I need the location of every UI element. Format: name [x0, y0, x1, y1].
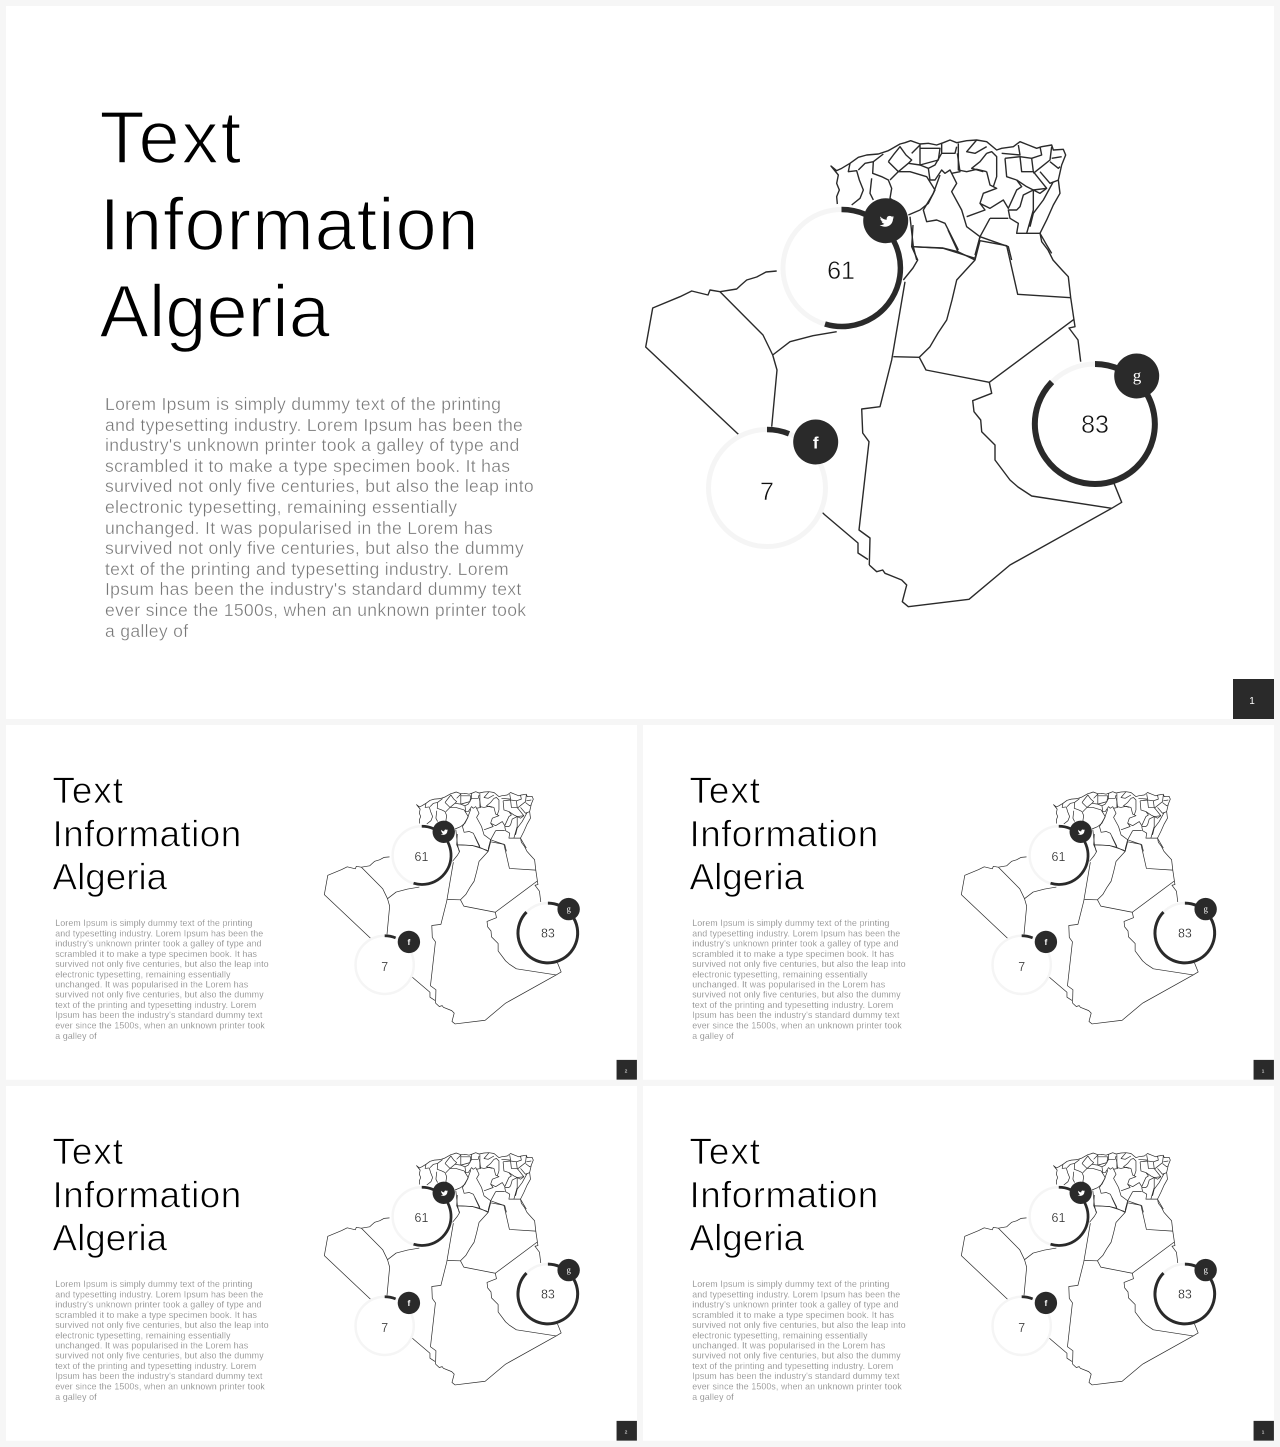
text block: text of the printing and typesetting industry. Lorem: [105, 559, 509, 579]
text block: and typesetting industry. Lorem Ipsum has been the: [692, 1290, 900, 1300]
panel: small slide 5: [643, 1086, 1274, 1441]
text block: scrambled it to make a type specimen book. It has: [692, 1310, 894, 1320]
gauge: twitter 61: 61: [1052, 1211, 1065, 1225]
text block: and typesetting industry. Lorem Ipsum has been the: [55, 1290, 263, 1300]
text block: [105, 394, 534, 641]
title: Information: [690, 1174, 879, 1216]
text block: a galley of: [55, 1031, 97, 1041]
text block: electronic typesetting, remaining essentially: [692, 1331, 868, 1341]
page number: 1: [1249, 696, 1255, 707]
map of Algeria: [961, 792, 1198, 1024]
text block: scrambled it to make a type specimen book. It has: [55, 949, 257, 959]
gauge: facebook 7: [708, 420, 838, 546]
text block: ever since the 1500s, when an unknown printer took: [55, 1382, 265, 1392]
page number: [617, 1421, 637, 1441]
title: Text: [690, 770, 761, 811]
gauge: facebook 7: f: [1045, 938, 1048, 948]
gauge: facebook 7: [356, 1292, 420, 1355]
text block: and typesetting industry. Lorem Ipsum has been the: [105, 415, 523, 435]
gauge: twitter 61: [1030, 1182, 1092, 1246]
text block: [692, 918, 906, 1041]
gauge: twitter 61: 61: [1052, 850, 1065, 864]
text block: text of the printing and typesetting industry. Lorem: [55, 1361, 256, 1371]
gauge: facebook 7: 7: [381, 1321, 388, 1335]
panel: small slide 2: [6, 725, 637, 1080]
page number: [1233, 679, 1274, 719]
text block: survived not only five centuries, but also the dummy: [692, 1351, 901, 1361]
text block: and typesetting industry. Lorem Ipsum has been the: [55, 929, 263, 939]
page number: [617, 1060, 637, 1080]
gauge: facebook 7: f: [813, 434, 819, 452]
gauge: facebook 7: [993, 1292, 1057, 1355]
gauge: google 83: g: [567, 1265, 572, 1275]
text block: survived not only five centuries, but also the leap into: [55, 959, 269, 969]
chart: Algeria map with gauges: [324, 791, 580, 1024]
title: Text: [53, 770, 124, 811]
map of Algeria: [324, 792, 561, 1024]
title: [53, 1131, 242, 1259]
panel: main slide: [6, 6, 1274, 719]
text block: unchanged. It was popularised in the Lorem has: [692, 980, 885, 990]
map of Algeria: [646, 140, 1122, 607]
title: Text: [100, 96, 243, 179]
title: [690, 770, 879, 898]
page number: 2: [625, 1430, 627, 1435]
gauge: google 83: 83: [1178, 1288, 1192, 1302]
chart: Algeria map with gauges: [645, 139, 1160, 608]
gauge: google 83: g: [1133, 366, 1142, 385]
gauge: facebook 7: f: [408, 1299, 411, 1309]
text block: and typesetting industry. Lorem Ipsum has been the: [692, 929, 900, 939]
text block: a galley of: [692, 1031, 734, 1041]
text block: Ipsum has been the industry's standard dummy text: [55, 1011, 263, 1021]
gauge: twitter 61: 61: [827, 257, 855, 285]
gauge: facebook 7: [993, 931, 1057, 994]
text block: survived not only five centuries, but also the dummy: [692, 990, 901, 1000]
text block: Ipsum has been the industry's standard dummy text: [692, 1372, 900, 1382]
map of Algeria: [961, 1153, 1198, 1385]
page number: 1: [1262, 1069, 1264, 1074]
text block: a galley of: [55, 1392, 97, 1402]
title: Algeria: [690, 857, 804, 898]
gauge: twitter 61: [393, 1182, 455, 1246]
text block: unchanged. It was popularised in the Lorem has: [692, 1341, 885, 1351]
text block: electronic typesetting, remaining essentially: [692, 970, 868, 980]
text block: [692, 1279, 906, 1402]
text block: Lorem Ipsum is simply dummy text of the printing: [692, 1279, 889, 1289]
page number: 1: [1262, 1430, 1264, 1435]
gauge: twitter 61: [1030, 821, 1092, 885]
title: [690, 1131, 879, 1259]
gauge: google 83: 83: [1178, 927, 1192, 941]
title: Algeria: [53, 1218, 167, 1259]
gauge: google 83: [1155, 1259, 1217, 1324]
text block: electronic typesetting, remaining essentially: [105, 497, 457, 517]
text block: survived not only five centuries, but also the leap into: [55, 1320, 269, 1330]
gauge: facebook 7: 7: [1018, 1321, 1025, 1335]
gauge: google 83: g: [1204, 1265, 1209, 1275]
page number: [1254, 1421, 1274, 1441]
text block: survived not only five centuries, but also the dummy: [55, 990, 264, 1000]
text block: survived not only five centuries, but also the leap into: [692, 1320, 906, 1330]
text block: Lorem Ipsum is simply dummy text of the printing: [55, 1279, 252, 1289]
text block: unchanged. It was popularised in the Lorem has: [105, 518, 493, 538]
panel: small slide 3: [643, 725, 1274, 1080]
gauge: twitter 61: [783, 198, 908, 326]
text block: Lorem Ipsum is simply dummy text of the printing: [692, 918, 889, 928]
title: Text: [53, 1131, 124, 1172]
text block: Ipsum has been the industry's standard dummy text: [55, 1372, 263, 1382]
gauge: twitter 61: 61: [415, 1211, 428, 1225]
gauge: facebook 7: [356, 931, 420, 994]
text block: text of the printing and typesetting industry. Lorem: [692, 1361, 893, 1371]
gauge: facebook 7: f: [408, 938, 411, 948]
text block: industry's unknown printer took a galley of type and: [55, 1300, 262, 1310]
text block: [55, 1279, 269, 1402]
text block: scrambled it to make a type specimen book. It has: [55, 1310, 257, 1320]
title: Information: [100, 183, 480, 266]
chart: Algeria map with gauges: [324, 1152, 580, 1386]
text block: industry's unknown printer took a galley of type and: [55, 939, 262, 949]
map of Algeria: [324, 1153, 561, 1385]
text block: ever since the 1500s, when an unknown printer took: [105, 600, 526, 620]
chart: Algeria map with gauges: [961, 1152, 1217, 1386]
title: Information: [53, 1174, 242, 1216]
title: Algeria: [100, 270, 330, 353]
text block: unchanged. It was popularised in the Lorem has: [55, 980, 248, 990]
text block: industry's unknown printer took a galley of type and: [105, 435, 520, 455]
text block: ever since the 1500s, when an unknown printer took: [692, 1382, 902, 1392]
text block: electronic typesetting, remaining essentially: [55, 970, 231, 980]
gauge: google 83: g: [1204, 904, 1209, 914]
page number: 2: [625, 1069, 627, 1074]
title: Information: [690, 813, 879, 855]
text block: scrambled it to make a type specimen book. It has: [105, 456, 510, 476]
gauge: twitter 61: [393, 821, 455, 885]
gauge: facebook 7: 7: [381, 960, 388, 974]
gauge: google 83: 83: [1081, 411, 1109, 439]
text block: survived not only five centuries, but also the leap into: [692, 959, 906, 969]
chart: Algeria map with gauges: [960, 791, 1217, 1024]
text block: Lorem Ipsum is simply dummy text of the printing: [105, 394, 501, 414]
title: [100, 96, 480, 353]
title: [53, 770, 242, 898]
text block: [55, 918, 269, 1041]
gauge: google 83: 83: [541, 1288, 555, 1302]
text block: ever since the 1500s, when an unknown printer took: [55, 1021, 265, 1031]
text block: a galley of: [692, 1392, 734, 1402]
gauge: google 83: 83: [541, 927, 555, 941]
text block: scrambled it to make a type specimen book. It has: [692, 949, 894, 959]
gauge: google 83: [518, 898, 580, 963]
gauge: facebook 7: f: [1045, 1299, 1048, 1309]
panel: small slide 4: [6, 1086, 637, 1441]
text block: survived not only five centuries, but also the dummy: [105, 538, 524, 558]
text block: survived not only five centuries, but also the leap into: [105, 476, 534, 496]
gauge: facebook 7: 7: [760, 478, 774, 506]
text block: Ipsum has been the industry's standard dummy text: [692, 1011, 900, 1021]
text block: survived not only five centuries, but also the dummy: [55, 1351, 264, 1361]
page number: [1254, 1060, 1274, 1080]
title: Algeria: [690, 1218, 804, 1259]
text block: Ipsum has been the industry's standard dummy text: [105, 579, 522, 599]
gauge: google 83: [1155, 898, 1217, 963]
text block: industry's unknown printer took a galley of type and: [692, 939, 899, 949]
text block: ever since the 1500s, when an unknown printer took: [692, 1021, 902, 1031]
title: Algeria: [53, 857, 167, 898]
text block: electronic typesetting, remaining essentially: [55, 1331, 231, 1341]
text block: Lorem Ipsum is simply dummy text of the printing: [55, 918, 252, 928]
gauge: google 83: [1035, 354, 1159, 484]
title: Information: [53, 813, 242, 855]
gauge: twitter 61: 61: [415, 850, 428, 864]
text block: industry's unknown printer took a galley of type and: [692, 1300, 899, 1310]
gauge: google 83: [518, 1259, 580, 1324]
title: Text: [690, 1131, 761, 1172]
text block: a galley of: [105, 621, 188, 641]
text block: text of the printing and typesetting industry. Lorem: [692, 1000, 893, 1010]
text block: unchanged. It was popularised in the Lorem has: [55, 1341, 248, 1351]
gauge: facebook 7: 7: [1018, 960, 1025, 974]
text block: text of the printing and typesetting industry. Lorem: [55, 1000, 256, 1010]
gauge: google 83: g: [567, 904, 572, 914]
